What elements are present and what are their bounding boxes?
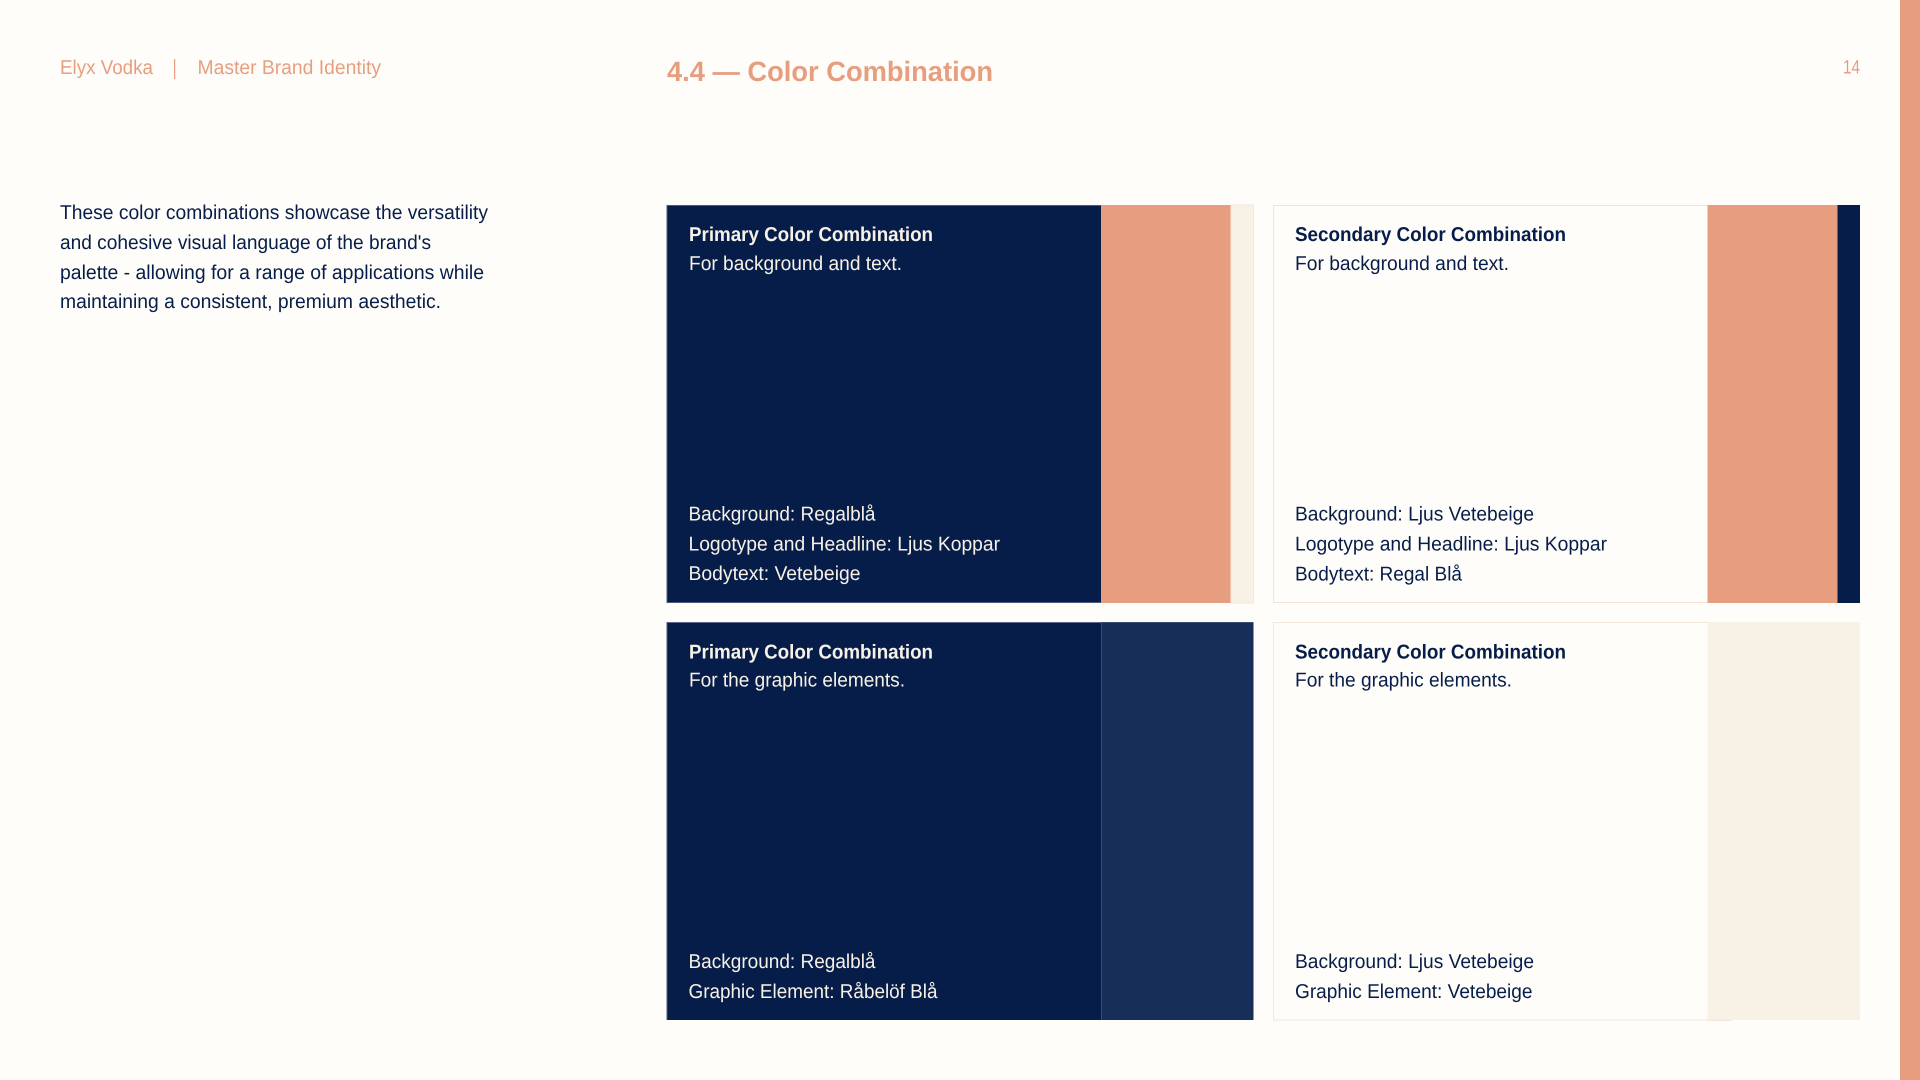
intro text block: and cohesive visual language of the brand's	[60, 232, 431, 254]
panel colour notes: Graphic Element: Råbelöf Blå	[688, 981, 938, 1003]
swatch: copper	[1101, 205, 1231, 603]
panel: secondary combination for graphic elements	[1274, 622, 1860, 1021]
panel heading: Primary Color Combination	[689, 642, 933, 664]
page number: 14	[1843, 56, 1860, 78]
swatch: beige	[1231, 205, 1254, 603]
panel heading: For background and text.	[1295, 253, 1509, 275]
panel heading	[689, 642, 933, 692]
intro text block: These color combinations showcase the versatility	[60, 202, 488, 224]
panel colour notes: Bodytext: Vetebeige	[688, 563, 860, 585]
panel colour notes: Graphic Element: Vetebeige	[1295, 981, 1532, 1003]
panel heading	[689, 224, 933, 275]
panel: primary combination for background and text	[666, 205, 1254, 603]
panel colour notes	[1295, 951, 1534, 1003]
panel heading: For the graphic elements.	[689, 670, 905, 692]
panel colour notes: Background: Regalblå	[688, 951, 876, 973]
panel colour notes	[688, 951, 938, 1003]
swatch: beige	[1708, 622, 1860, 1020]
panel heading: For the graphic elements.	[1295, 670, 1512, 692]
header: brand breadcrumb	[60, 57, 381, 79]
heading: section title: 4.4 — Color Combination	[667, 56, 993, 87]
panel heading: Secondary Color Combination	[1295, 642, 1566, 664]
intro text block: palette - allowing for a range of applications while	[60, 262, 484, 284]
intro text block: maintaining a consistent, premium aesthetic.	[60, 291, 441, 313]
panel colour notes	[1295, 504, 1607, 586]
panel: secondary combination for background and text	[1274, 205, 1860, 603]
panel heading	[1295, 642, 1566, 692]
panel colour notes: Bodytext: Regal Blå	[1295, 564, 1463, 586]
intro text block	[60, 202, 488, 313]
panel colour notes: Logotype and Headline: Ljus Koppar	[688, 534, 1000, 556]
panel colour notes: Background: Ljus Vetebeige	[1295, 504, 1534, 526]
swatch: copper	[1708, 205, 1838, 603]
header: brand breadcrumb: Master Brand Identity	[198, 57, 381, 79]
panel: primary combination for graphic elements	[666, 622, 1254, 1020]
swatch: navy	[1838, 205, 1860, 603]
swatch: Råbelöf Blå	[1101, 622, 1254, 1020]
panel heading: Primary Color Combination	[689, 224, 933, 246]
panel colour notes: Background: Ljus Vetebeige	[1295, 951, 1534, 973]
panel colour notes: Background: Regalblå	[688, 504, 876, 526]
panel heading: For background and text.	[689, 253, 902, 275]
panel heading: Secondary Color Combination	[1295, 224, 1566, 246]
panel colour notes	[688, 504, 1000, 585]
panel colour notes: Logotype and Headline: Ljus Koppar	[1295, 534, 1607, 556]
panel heading	[1295, 224, 1566, 275]
header: brand breadcrumb: Elyx Vodka	[60, 57, 154, 79]
right edge copper bar	[1900, 0, 1920, 1080]
